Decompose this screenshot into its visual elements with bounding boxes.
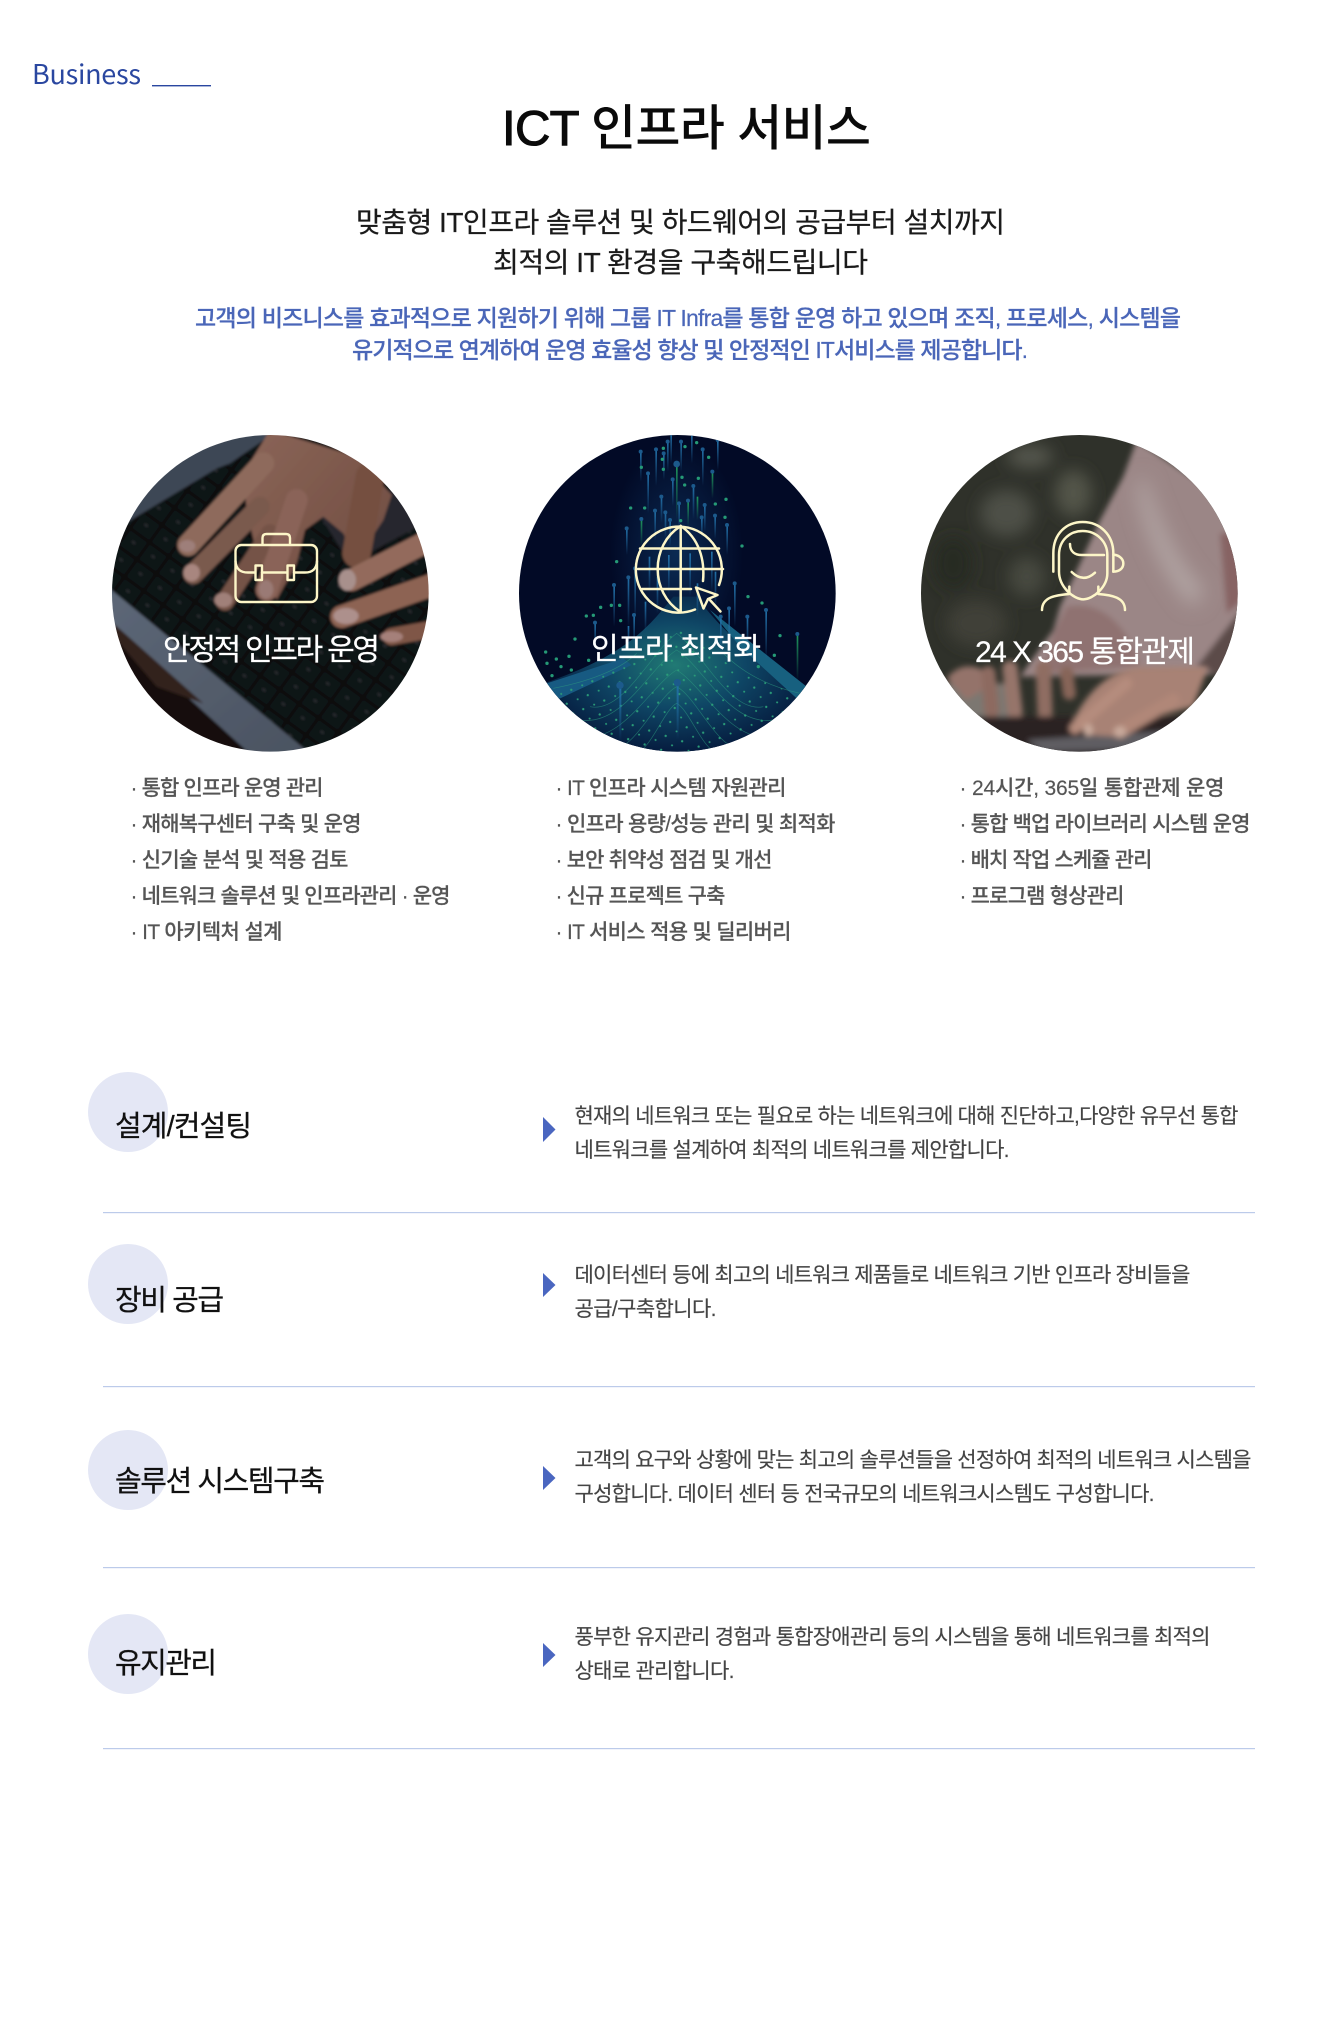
list: infrastructure optimization: · IT 인프라 시스템 자원관리 xyxy=(556,777,786,800)
row heading: 유지관리 xyxy=(115,1648,217,1680)
arrow xyxy=(543,1273,556,1297)
photo: digital network xyxy=(519,435,836,752)
blue intro text: 유기적으로 연계하여 운영 효율성 향상 및 안정적인 IT서비스를 제공합니다. xyxy=(352,337,1028,363)
list: integrated monitoring: · 배치 작업 스케쥴 관리 xyxy=(960,849,1152,872)
list: infrastructure optimization: · 보안 취약성 점검 및 개선 xyxy=(556,849,772,872)
heading badge xyxy=(88,1430,168,1510)
arrow xyxy=(543,1117,556,1142)
title: ICT 인프라 서비스 xyxy=(502,102,871,156)
list: integrated monitoring xyxy=(960,777,1250,908)
row heading: 설계/컨설팅 xyxy=(115,1111,252,1143)
row description: 구성합니다. 데이터 센터 등 전국규모의 네트워크시스템도 구성합니다. xyxy=(574,1483,1154,1506)
heading badge xyxy=(88,1614,168,1694)
vertical data lines xyxy=(594,433,767,742)
row heading: 장비 공급 xyxy=(115,1285,224,1317)
panel: 24 x 365 integrated monitoring xyxy=(921,435,1238,752)
list: infrastructure optimization: · 신규 프로젝트 구축 xyxy=(556,885,726,908)
green particles xyxy=(544,441,782,677)
row description xyxy=(574,1105,1238,1162)
line end nodes xyxy=(593,438,799,689)
heading badge xyxy=(88,1072,168,1152)
list: integrated monitoring: · 통합 백업 라이브러리 시스템 운영 xyxy=(960,813,1250,836)
blue intro text xyxy=(195,305,1181,363)
row heading: 솔루션 시스템구축 xyxy=(115,1466,325,1498)
row: equipment supply xyxy=(88,1244,1190,1324)
icon: briefcase xyxy=(236,534,317,602)
list: stable infrastructure operation: · IT 아키텍처 설계 xyxy=(130,921,282,944)
photo: person typing xyxy=(921,435,1238,752)
panel: infrastructure optimization xyxy=(519,435,836,752)
list: infrastructure optimization: · 인프라 용량/성능 관리 및 최적화 xyxy=(556,813,836,836)
icon: headset operator xyxy=(1042,522,1125,610)
icon: globe with cursor xyxy=(636,526,723,613)
row: solution system build xyxy=(88,1430,1252,1510)
list: stable infrastructure operation: · 재해복구센터 구축 및 운영 xyxy=(130,813,362,836)
subtitle xyxy=(356,207,1005,278)
subtitle: 맞춤형 IT인프라 솔루션 및 하드웨어의 공급부터 설치까지 xyxy=(356,207,1005,238)
list: stable infrastructure operation: · 통합 인프라 운영 관리 xyxy=(130,777,324,800)
panel: stable infrastructure operation xyxy=(103,427,437,760)
subtitle: 최적의 IT 환경을 구축해드립니다 xyxy=(493,247,868,278)
arrow xyxy=(543,1466,556,1490)
row: design and consulting xyxy=(88,1072,1238,1162)
photo: hands on keyboard xyxy=(103,427,437,760)
row description xyxy=(574,1449,1252,1506)
row description: 공급/구축합니다. xyxy=(574,1298,716,1321)
row description: 네트워크를 설계하여 최적의 네트워크를 제안합니다. xyxy=(574,1139,1010,1162)
list: stable infrastructure operation: · 신기술 분석 및 적용 검토 xyxy=(130,849,348,872)
list: integrated monitoring: · 프로그램 형상관리 xyxy=(960,885,1124,908)
row description xyxy=(574,1626,1210,1683)
row description: 현재의 네트워크 또는 필요로 하는 네트워크에 대해 진단하고,다양한 유무선 통합 xyxy=(574,1105,1238,1128)
section label: Business: Business xyxy=(32,53,141,92)
list: infrastructure optimization: · IT 서비스 적용 및 딜리버리 xyxy=(556,921,792,944)
list: infrastructure optimization xyxy=(556,777,836,944)
heading badge xyxy=(88,1244,168,1324)
row: maintenance xyxy=(88,1614,1210,1694)
row description xyxy=(574,1264,1190,1321)
list: stable infrastructure operation xyxy=(130,777,450,944)
row description: 데이터센터 등에 최고의 네트워크 제품들로 네트워크 기반 인프라 장비들을 xyxy=(574,1264,1190,1287)
row description: 풍부한 유지관리 경험과 통합장애관리 등의 시스템을 통해 네트워크를 최적의 xyxy=(574,1626,1210,1649)
list: integrated monitoring: · 24시간, 365일 통합관제 운영 xyxy=(960,777,1224,800)
arrow xyxy=(543,1643,556,1667)
row description: 고객의 요구와 상황에 맞는 최고의 솔루션들을 선정하여 최적의 네트워크 시스템을 xyxy=(574,1449,1252,1472)
circle label: 24 X 365 통합관제 xyxy=(975,636,1195,669)
list: stable infrastructure operation: · 네트워크 솔루션 및 인프라관리 · 운영 xyxy=(130,885,450,908)
circle label: 안정적 인프라 운영 xyxy=(163,634,380,667)
blue intro text: 고객의 비즈니스를 효과적으로 지원하기 위해 그룹 IT Infra를 통합 운영 하고 있으며 조직, 프로세스, 시스템을 xyxy=(195,305,1181,331)
circle label: 인프라 최적화 xyxy=(591,633,761,666)
row description: 상태로 관리합니다. xyxy=(574,1660,734,1683)
